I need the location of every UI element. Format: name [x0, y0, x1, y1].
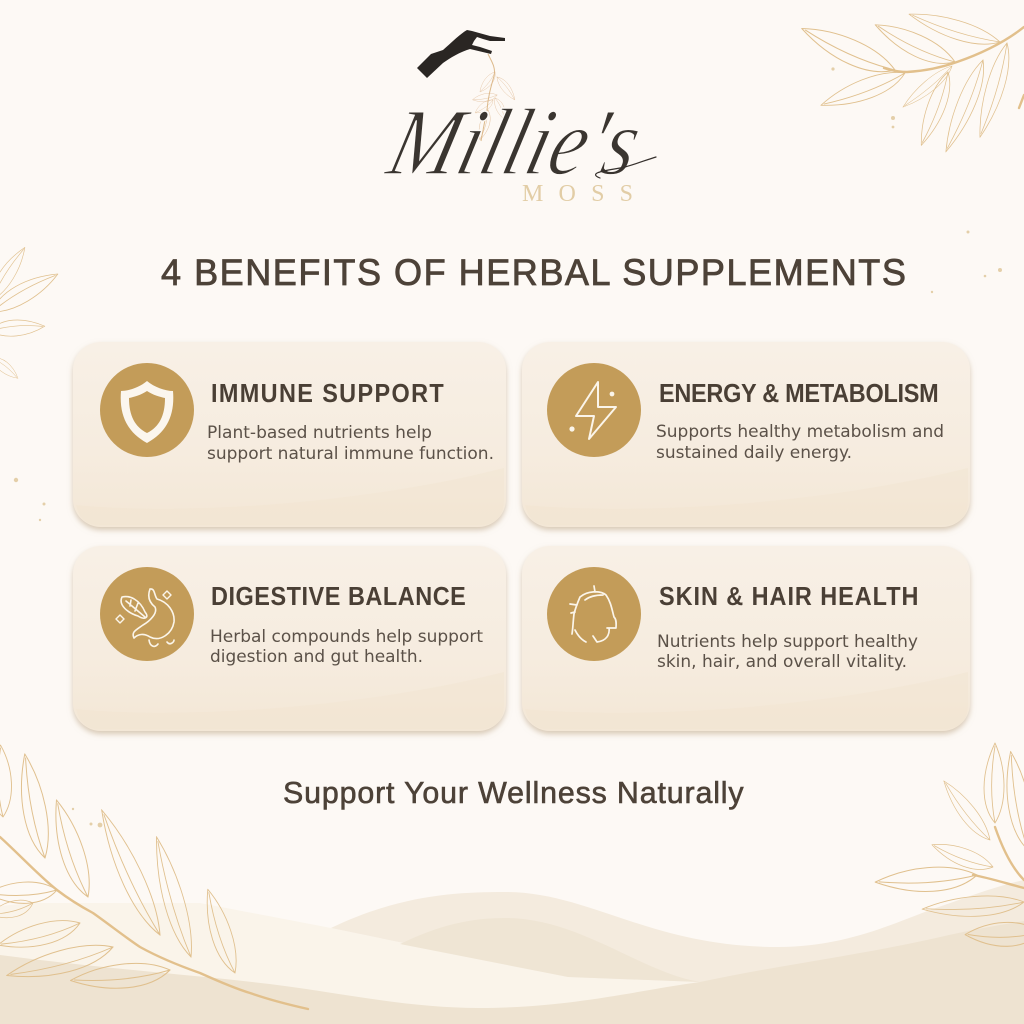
- leaf branch: middle left: [0, 243, 62, 382]
- logo: Millie's Moss: [377, 30, 656, 207]
- leaf branch: bottom right: [874, 743, 1024, 948]
- leaf branch: bottom left: [0, 745, 308, 1009]
- body text: Nutrients help support healthy: [657, 632, 918, 652]
- heading: ENERGY & METABOLISM: [659, 380, 939, 408]
- body text: support natural immune function.: [207, 444, 494, 464]
- icon: shield: [100, 363, 194, 457]
- body text: Herbal compounds help support: [210, 627, 483, 647]
- heading: SKIN & HAIR HEALTH: [659, 583, 918, 611]
- speckles: [14, 67, 1002, 827]
- logo subtitle: MOSS: [522, 181, 633, 207]
- icon: head profile: [547, 567, 641, 661]
- leaf branch: top right: [796, 6, 1024, 155]
- body text: digestion and gut health.: [210, 647, 423, 667]
- heading: DIGESTIVE BALANCE: [211, 583, 466, 611]
- background hills: [0, 880, 1024, 1024]
- tagline: Support Your Wellness Naturally: [283, 775, 744, 810]
- panel: skin and hair health: [522, 546, 970, 731]
- panel: digestive balance: [73, 546, 506, 731]
- panel: energy and metabolism: [522, 342, 970, 527]
- logo swash: [596, 157, 656, 178]
- body text: Supports healthy metabolism and: [656, 422, 944, 442]
- panel: immune support: [73, 342, 506, 527]
- logo script wordmark: Millie's: [377, 90, 652, 196]
- body text: sustained daily energy.: [656, 443, 852, 463]
- body text: skin, hair, and overall vitality.: [657, 652, 907, 672]
- icon: stomach and leaf: [100, 567, 194, 661]
- icon: hand holding sprig: [417, 30, 518, 141]
- heading: IMMUNE SUPPORT: [211, 380, 444, 408]
- title: 4 BENEFITS OF HERBAL SUPPLEMENTS: [161, 252, 906, 293]
- icon: lightning bolt: [547, 363, 641, 457]
- body text: Plant-based nutrients help: [207, 423, 432, 443]
